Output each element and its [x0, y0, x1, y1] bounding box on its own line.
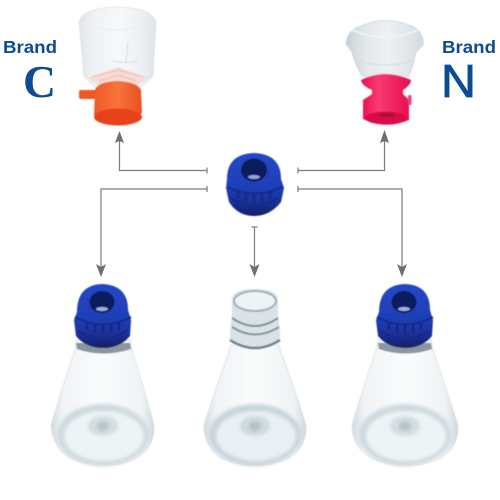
- flask: right with blue cap: [352, 284, 458, 466]
- icon: blue cap connector: [226, 153, 284, 216]
- flask: centre open neck: [204, 289, 306, 466]
- heading: Brand C: C: [23, 56, 56, 107]
- arrow: connector to left flask: [96, 186, 207, 277]
- arrow: connector to Brand N: [298, 130, 389, 174]
- heading: Brand N: Brand: [442, 37, 496, 57]
- orange base: [79, 90, 98, 99]
- icon: Brand C filter funnel: [79, 7, 156, 126]
- heading: Brand N: [441, 37, 496, 107]
- heading: Brand C: Brand: [3, 37, 57, 57]
- heading: Brand C: [3, 37, 57, 107]
- heading: Brand N: N: [441, 55, 476, 107]
- flask: left with blue cap: [51, 284, 154, 466]
- pink collar and base: [361, 74, 411, 125]
- icon: Brand N filter funnel: [346, 20, 423, 125]
- arrow: connector to Brand C: [115, 131, 207, 174]
- arrow: connector to centre flask: [250, 227, 260, 277]
- arrow: connector to right flask: [298, 186, 407, 277]
